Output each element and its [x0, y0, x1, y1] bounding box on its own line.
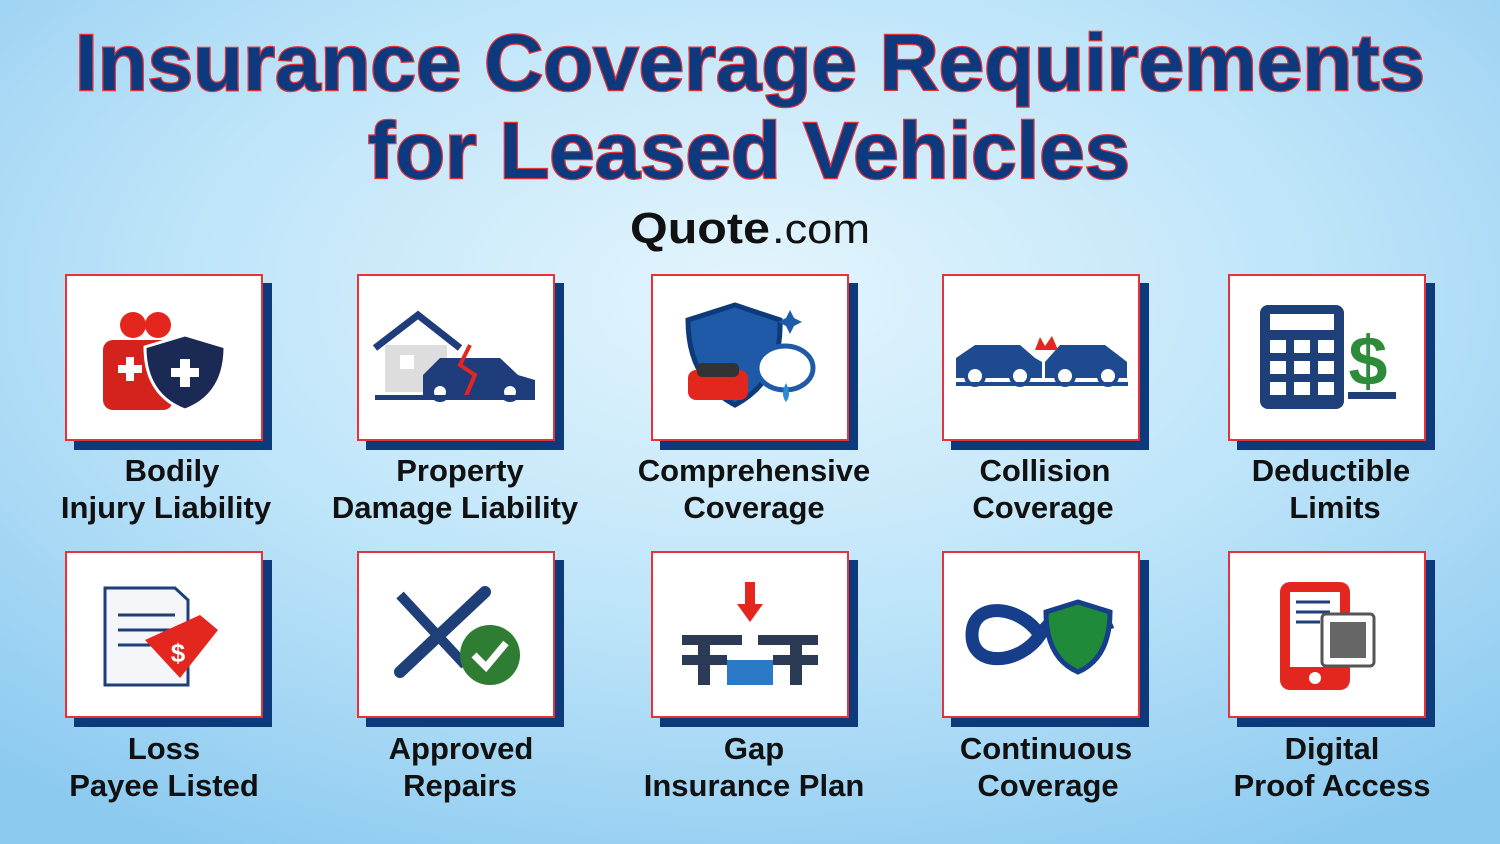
card: Bodily Injury Liability: Injury Liability: [61, 490, 272, 525]
card: Property Damage Liability: Damage Liability: [332, 490, 579, 525]
card: Deductible Limits: Limits: [1289, 490, 1381, 525]
card: Continuous Coverage: [943, 552, 1149, 803]
label: Loss: [128, 731, 200, 766]
label: Bodily: [125, 453, 220, 488]
card: Collision Coverage: [943, 275, 1149, 525]
card: Digital Proof Access: Proof Access: [1234, 768, 1430, 803]
icon: people with shield: [103, 312, 225, 410]
label: Collision: [980, 453, 1110, 488]
card: Approved Repairs: [358, 552, 564, 803]
icon: calculator and dollar: [1260, 305, 1396, 409]
icon: house and car: [375, 315, 535, 400]
card: Gap Insurance Plan: Insurance Plan: [644, 768, 864, 803]
logo: Quote.com: .com: [772, 205, 870, 252]
label: Approved: [389, 731, 533, 766]
card: Digital Proof Access: [1229, 552, 1435, 803]
card: Approved Repairs: Repairs: [403, 768, 517, 803]
icon: document with price tag: $: [171, 638, 186, 668]
title: [75, 18, 1425, 195]
card: Loss Payee Listed: [66, 552, 272, 803]
card: Comprehensive Coverage: Coverage: [683, 490, 825, 525]
logo: Quote.com: Quote: [630, 204, 770, 253]
card: Loss Payee Listed: Payee Listed: [69, 768, 259, 803]
label: Digital: [1285, 731, 1379, 766]
label: Property: [396, 453, 524, 488]
label: Deductible: [1252, 453, 1410, 488]
card: Continuous Coverage: Coverage: [977, 768, 1119, 803]
icon: gap bridge with arrow: [682, 582, 818, 685]
icon: document with price tag: [105, 588, 218, 685]
logo: Quote.com: [630, 204, 870, 253]
card: Bodily Injury Liability: [61, 275, 272, 525]
title: for Leased Vehicles: [368, 106, 1130, 195]
card: Gap Insurance Plan: [644, 552, 864, 803]
title: Insurance Coverage Requirements: [75, 18, 1425, 107]
label: Continuous: [960, 731, 1132, 766]
icon: tools with checkmark: [400, 592, 520, 685]
icon: calculator and dollar: $: [1349, 322, 1387, 400]
label: Comprehensive: [638, 453, 870, 488]
label: Gap: [724, 731, 784, 766]
icon: two cars colliding: [956, 336, 1128, 386]
card: Property Damage Liability: [332, 275, 579, 525]
icon: infinity with shield: [972, 602, 1110, 672]
card: Collision Coverage: Coverage: [972, 490, 1114, 525]
icon: phone with QR: [1280, 582, 1374, 690]
icon: shield, car, cloud: [688, 305, 813, 405]
card: Deductible Limits: [1229, 275, 1435, 525]
card: Comprehensive Coverage: [638, 275, 870, 525]
